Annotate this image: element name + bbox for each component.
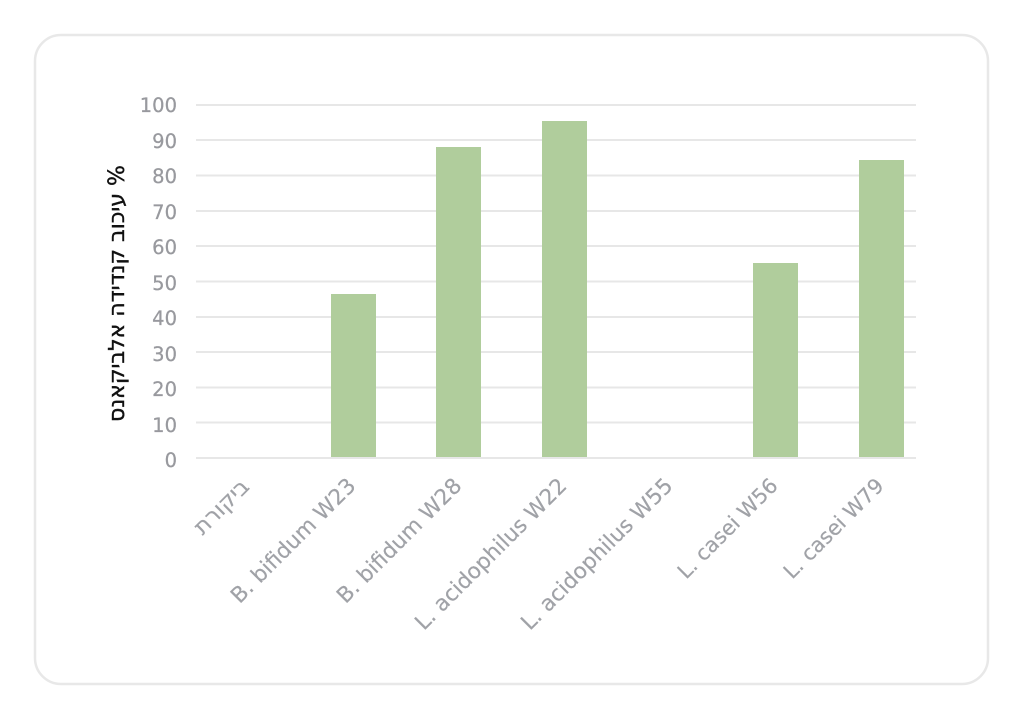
y axis labels: 10 (152, 414, 177, 437)
y axis labels: 60 (152, 236, 177, 259)
y axis labels: 90 (152, 130, 177, 153)
bars (331, 121, 904, 457)
y axis labels: 50 (152, 272, 177, 295)
y axis labels: 100 (140, 94, 177, 117)
y axis labels: 40 (152, 307, 177, 330)
x axis labels: L. acidophilus W22 (410, 474, 572, 635)
y axis labels: 0 (165, 449, 177, 472)
x axis labels: B. bifidum W23 (226, 474, 361, 609)
y axis labels: 20 (152, 378, 177, 401)
x axis labels: B. bifidum W28 (332, 474, 467, 609)
x axis labels: ביקורת (189, 474, 255, 540)
y axis title: % עיכוב קנדידה אלביקאנס (105, 165, 130, 422)
y axis labels: 70 (152, 201, 177, 224)
x axis labels: L. casei W79 (779, 474, 889, 583)
x axis labels (189, 474, 889, 635)
y axis labels (140, 94, 177, 472)
x axis labels: L. acidophilus W55 (516, 474, 678, 635)
y axis labels: 30 (152, 343, 177, 366)
y axis labels: 80 (152, 165, 177, 188)
x axis labels: L. casei W56 (673, 474, 783, 583)
